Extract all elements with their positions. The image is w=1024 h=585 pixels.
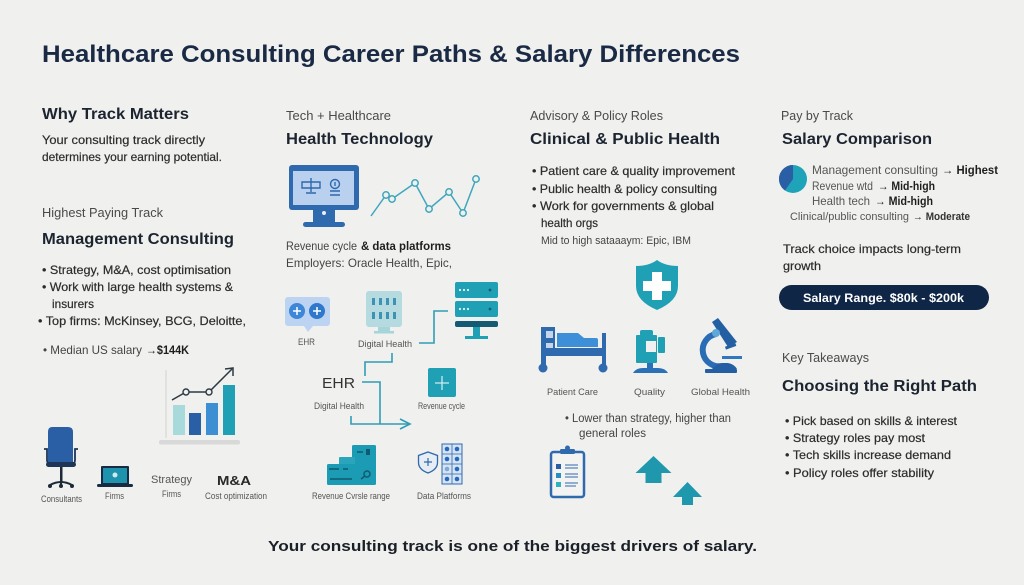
text block: track choice: growth — [783, 259, 821, 273]
label: revenue cycle range: Revenue Cvrsle range — [312, 491, 390, 501]
label: strategy firms: Firms — [162, 489, 181, 499]
label: quality: Quality — [634, 387, 666, 397]
bullet list: management consulting: insurers — [52, 297, 94, 311]
icon: revenue cycle documents — [327, 445, 376, 485]
text block: salary comparison list: → Highest — [942, 163, 998, 177]
panel: management consulting column — [38, 106, 267, 504]
icon: large up arrow — [636, 456, 672, 483]
label: digital health sub: Digital Health — [314, 401, 364, 411]
text block: track choice — [783, 242, 961, 273]
text block: salary comparison list: Revenue wtd — [812, 179, 873, 193]
bullet list: clinical roles: • Public health & policy consulting — [532, 182, 717, 196]
bullet list: clinical roles: • Patient care & quality improvement — [532, 164, 736, 178]
text block: salary comparison list: → Mid-high — [875, 194, 933, 208]
label: M&A cost optimization: Cost optimization — [205, 491, 267, 501]
text block: pay comparison — [565, 413, 731, 440]
chart: rising bars and trend line — [159, 368, 240, 444]
text block: revenue cycle and employers: Revenue cycle — [286, 239, 357, 253]
text block: salary comparison list — [790, 163, 998, 223]
text block: salary comparison list: Clinical/public consulting — [790, 211, 909, 223]
text block: salary comparison list: Management consulting — [812, 163, 938, 177]
icon: digital health display — [366, 291, 402, 334]
icon: laptop — [97, 466, 133, 487]
text block: pay comparison: • Lower than strategy, higher than — [565, 413, 731, 425]
icon: quality device — [633, 330, 668, 373]
bullet list: management consulting — [38, 263, 246, 357]
footer statement: Your consulting track is one of the biggest drivers of salary. — [268, 538, 757, 555]
label: strategy firms: Strategy — [151, 474, 192, 486]
icon: clipboard — [551, 446, 584, 497]
label: revenue cycle: Revenue cycle — [418, 401, 465, 411]
icon: EHR chat bubble — [285, 297, 330, 332]
text block: why track matters — [42, 133, 222, 164]
bullet list: clinical roles: Mid to high sataaaym: Epic, IBM — [541, 235, 691, 247]
icon: office chair — [44, 427, 78, 488]
heading: salary comparison: Salary Comparison — [782, 131, 932, 148]
bullet list: clinical roles: health orgs — [541, 216, 598, 230]
icon: hospital bed — [538, 327, 608, 372]
bullet list: management consulting: • Median US salary — [43, 343, 142, 357]
bullet list: management consulting: • Strategy, M&A, cost optimisation — [42, 263, 231, 277]
heading: choosing the right path: Choosing the Right Path — [782, 378, 977, 395]
label: strategy firms — [151, 474, 192, 499]
label: digital health: Digital Health — [358, 339, 412, 349]
bullet list: management consulting: • Work with large health systems & — [42, 280, 233, 294]
label: firms: Firms — [105, 491, 124, 501]
text block: revenue cycle and employers: & data platforms — [361, 239, 451, 253]
label: EHR: EHR — [298, 337, 315, 347]
chart: teal line chart — [371, 176, 479, 216]
panel: clinical and public health column — [530, 109, 750, 505]
callout: salary range pill — [779, 285, 989, 310]
text block: salary comparison list: → Moderate — [913, 211, 970, 223]
text block: salary comparison list: → Mid-high — [878, 179, 935, 193]
kicker: pay by track: Pay by Track — [781, 109, 854, 123]
icon: medical shield — [636, 260, 678, 310]
heading: clinical and public health: Clinical & Public Health — [530, 131, 720, 148]
kicker: highest paying track: Highest Paying Track — [42, 206, 164, 220]
label: global health: Global Health — [691, 387, 750, 397]
panel: health technology column — [285, 109, 498, 501]
chart: pie — [779, 165, 807, 193]
icon: microscope — [703, 318, 742, 373]
callout: salary range pill: Salary Range. $80k - $200k — [803, 293, 965, 305]
label: patient care: Patient Care — [547, 387, 598, 397]
bullet list: takeaways: • Tech skills increase demand — [785, 448, 951, 462]
arrow: teal flow arrow — [351, 382, 410, 429]
arrow: connector from server to digital health — [419, 311, 448, 343]
kicker: key takeaways: Key Takeaways — [782, 351, 869, 365]
text block: revenue cycle and employers — [286, 239, 452, 270]
text block: why track matters: determines your earning potential. — [42, 150, 222, 164]
title: Healthcare Consulting Career Paths & Salary Differences — [42, 41, 740, 68]
text block: revenue cycle and employers: Employers: Oracle Health, Epic, — [286, 256, 452, 270]
label: M&A cost optimization — [205, 473, 267, 501]
bullet list: management consulting: →$144K — [146, 343, 189, 357]
icon: server stack — [455, 282, 498, 339]
icon: small up arrow — [673, 482, 702, 505]
icon: teal plus tile — [428, 368, 456, 397]
text block: pay comparison: general roles — [579, 428, 646, 440]
label: M&A cost optimization: M&A — [217, 473, 252, 488]
heading: why track matters: Why Track Matters — [42, 106, 189, 123]
bullet list: takeaways: • Pick based on skills & interest — [785, 414, 958, 428]
heading: management consulting: Management Consulting — [42, 231, 234, 248]
panel: salary comparison column — [779, 109, 998, 480]
bullet list: takeaways — [785, 414, 958, 480]
icon: desktop monitor — [289, 165, 359, 227]
bullet list: clinical roles — [532, 164, 736, 247]
bullet list: takeaways: • Policy roles offer stability — [785, 466, 934, 480]
bullet list: clinical roles: • Work for governments & global — [532, 199, 714, 213]
kicker: tech + healthcare: Tech + Healthcare — [286, 109, 391, 123]
bullet list: management consulting: • Top firms: McKinsey, BCG, Deloitte, — [38, 314, 246, 328]
label: EHR large: EHR — [322, 375, 355, 392]
label: consultants: Consultants — [41, 494, 82, 504]
text block: salary comparison list: Health tech — [812, 194, 870, 208]
heading: health technology: Health Technology — [286, 131, 433, 148]
icon: data platform shield and grid — [418, 444, 462, 484]
text block: why track matters: Your consulting track directly — [42, 133, 205, 147]
kicker: advisory and policy roles: Advisory & Policy Roles — [530, 109, 663, 123]
label: data platforms: Data Platforms — [417, 491, 471, 501]
text block: track choice: Track choice impacts long-term — [783, 242, 961, 256]
bullet list: takeaways: • Strategy roles pay most — [785, 431, 926, 445]
arrow: connector from digital health to EHR — [365, 353, 392, 376]
